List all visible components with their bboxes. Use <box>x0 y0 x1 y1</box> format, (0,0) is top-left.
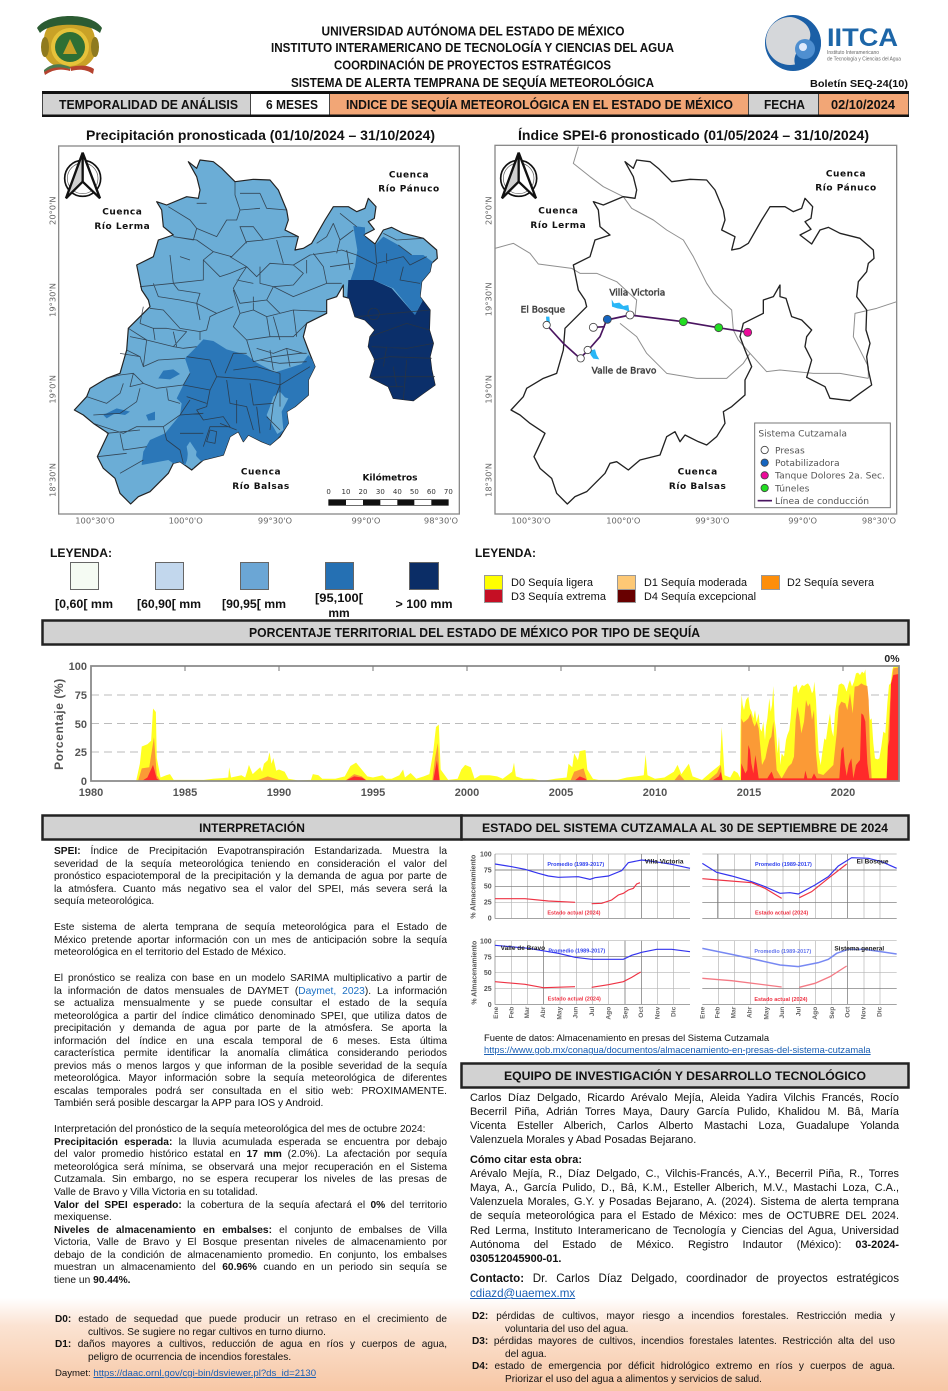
chart: Valle de Bravo: 0 <box>488 1002 492 1009</box>
dashed grid lines <box>91 695 899 752</box>
legend: precipitation classes <box>50 546 452 620</box>
team and citation text: Carlos Díaz Delgado, Ricardo Arévalo Mejía, Aleida Yadira Vilchis Francés, Rocío <box>470 1092 899 1104</box>
chart: Valle de Bravo: 25 <box>484 986 492 993</box>
chart: Villa Victoria: % Almacenamiento <box>471 855 478 919</box>
interpretation text block: México pretende aportar información con un mes de anticipación sobre la sequía <box>54 934 447 946</box>
team and citation text: Becerril Piña, Adrián Torres Maya, Daury García Pulido, Khalidou M. Bâ, María <box>470 1106 899 1118</box>
interpretation text block: se actualiza mensualmente y se puede consultar el estado de la sequía <box>54 998 447 1009</box>
axis labels: 1980 <box>79 787 103 799</box>
basin labels: Río Balsas <box>669 482 726 492</box>
chart: Valle de Bravo: Mar <box>524 1006 531 1019</box>
team and citation text: Arévalo Mejía, R., Díaz Delgado, C., Vilchis-Francés, A.Y., Becerril Piña, R., Torres <box>470 1168 899 1180</box>
panel: precipitation map <box>47 145 460 526</box>
chart: Sistema general: Sep <box>829 1007 836 1019</box>
team and citation text: Maya, A., García Pulido, D., Bâ, K.M., Esteller Alberich, M.V., Mastachi Loza, C.A., <box>470 1182 899 1194</box>
header info bar: FECHA <box>764 98 805 112</box>
coordinate labels: 99°30'O <box>258 516 293 526</box>
scale bar: 20 <box>359 488 367 496</box>
municipal boundaries <box>87 182 435 473</box>
team and citation text: Autónoma del Estado de México. Registro Indautor (México): 03-2024- <box>470 1239 899 1251</box>
heading bar: territorial percentage: PORCENTAJE TERRITORIAL DEL ESTADO DE MÉXICO POR TIPO DE SEQUÍA <box>249 625 700 640</box>
chart: Valle de Bravo: May <box>557 1006 564 1020</box>
chart: Villa Victoria: Promedio (1989-2017) <box>547 862 604 868</box>
basin labels: Cuenca <box>241 468 281 478</box>
legend: Sistema Cutzamala: Túneles <box>774 483 810 494</box>
basin labels: Cuenca <box>102 208 142 218</box>
drought definitions: D2, D3 and D4: D4: estado de emergencia por déficit hidrológico extremo en ríos y cuerpos de agua. <box>472 1361 895 1372</box>
bottom gradient band <box>0 1298 948 1391</box>
team and citation text: Cómo citar esta obra: <box>470 1154 582 1166</box>
interpretation text block: información del índice en una escala temporal de 6 meses. Esta última <box>54 1036 447 1046</box>
coordinate labels: 19°0'N <box>47 375 57 404</box>
header titles: UNIVERSIDAD AUTÓNOMA DEL ESTADO DE MÉXICO <box>322 24 625 38</box>
icon: north arrow <box>65 153 101 198</box>
chart: Valle de Bravo: Nov <box>654 1006 661 1019</box>
interpretation text block: Valor del SPEI esperado: la cobertura de la sequía afectará el 0% del territorio <box>54 1200 447 1210</box>
chart: El Bosque: Promedio (1989-2017) <box>755 862 812 868</box>
area: D3 recent years <box>741 674 899 781</box>
coordinate labels: 19°0'N <box>483 375 493 404</box>
interpretation text block: También será posible descargar la APP para IOS y Android. <box>54 1098 323 1109</box>
interpretation text block: severidad de la sequía meteorológica teniendo en consideración el valor del <box>54 858 447 870</box>
chart: Sistema general: Abr <box>746 1006 753 1018</box>
basin labels: Cuenca <box>389 170 429 180</box>
legend: precipitation classes: LEYENDA: <box>50 546 112 560</box>
axis labels: 1985 <box>173 787 197 799</box>
legend: precipitation classes: [0,60[ mm <box>55 597 113 611</box>
scale bar: 50 <box>410 488 419 496</box>
area: D0 early years <box>136 709 741 781</box>
chart: Valle de Bravo: Promedio (1989-2017) <box>548 949 605 955</box>
area: D3 early years <box>142 760 723 781</box>
data source note: https://www.gob.mx/conagua/documentos/almacenamiento-en-presas-del-sistema-cutzamala <box>484 1044 871 1055</box>
annotation: current value: 0% <box>884 653 900 665</box>
chart: Sistema general: Ago <box>812 1007 819 1020</box>
interpretation text block: la información de datos mensuales de DAYMET (Daymet, 2023). La información <box>54 986 447 996</box>
heading bar: interpretation <box>41 814 463 841</box>
basin labels: Río Lerma <box>94 222 150 232</box>
interpretation text block: Interpretación del pronóstico de la sequía meteorológica del mes de octubre 2024: <box>54 1124 426 1135</box>
basin labels: Río Lerma <box>530 221 586 231</box>
axis labels <box>52 661 855 799</box>
interpretation text block: meteorológica a partir del índice climático denominado SPEI, que utiliza datos de <box>54 1010 447 1022</box>
chart: El Bosque <box>702 854 897 918</box>
axis labels: 50 <box>75 719 87 731</box>
coordinate labels: 100°0'O <box>606 516 641 526</box>
scale bar: 30 <box>376 488 385 496</box>
interpretation text block: pronóstico espaciotemporal de la precipitación y la demanda de agua por parte de <box>54 871 447 882</box>
interpretation text block: sequía meteorológica. <box>54 896 154 907</box>
drought definitions: D2, D3 and D4: D2: pérdidas de cultivos, mayor riesgo a incendios forestales. Restricción media y <box>472 1311 895 1322</box>
coordinate labels <box>47 196 459 526</box>
heading bar: territorial percentage <box>41 619 910 646</box>
reservoir labels: Villa Victoria <box>609 289 665 299</box>
axis labels: 2015 <box>737 787 761 799</box>
data source note: Fuente de datos: Almacenamiento en presas del Sistema Cutzamala <box>484 1032 769 1043</box>
interpretation text block: tiene un 90.44%. <box>54 1274 130 1286</box>
reservoir labels <box>521 289 665 376</box>
logo: IITCA: IITCA <box>827 24 898 52</box>
team and citation text: de sequía meteorológica para el Estado de México: mes de OCTUBRE DEL 2024. <box>470 1210 899 1222</box>
heading bar: research team <box>460 1062 910 1089</box>
team and citation text: Valenzuela Morales, G.Y. y Posadas Bejarano, A. (2024). Sistema de alerta temprana <box>470 1196 899 1208</box>
legend: drought categories: D2 Sequía severa <box>787 577 875 589</box>
chart: Valle de Bravo: 50 <box>484 970 492 977</box>
interpretation text block: previos más o menos largos y que informan de la posible severidad de la sequía <box>54 1060 447 1072</box>
header info bar <box>42 91 909 117</box>
coordinate labels: 100°0'O <box>169 516 203 526</box>
interpretation text block: debajo de la condición de almacenamiento promedio. En conjunto, los embalses <box>54 1250 447 1260</box>
axis labels: 1990 <box>267 787 291 799</box>
interpretation text block: característica permite identificar la anomalía climática considerando periodos <box>54 1048 447 1059</box>
coordinate labels: 19°30'N <box>483 282 493 316</box>
logo: UAEM coat of arms <box>37 16 102 75</box>
basin labels: Río Pánuco <box>815 184 877 194</box>
drought definitions: D0 and D1 <box>55 1314 447 1379</box>
legend: Sistema Cutzamala: Tanque Dolores 2a. Sec. <box>774 471 885 482</box>
basin labels <box>530 169 877 492</box>
axis labels: 2010 <box>643 787 667 799</box>
heading: precipitation map: Precipitación pronosticada (01/10/2024 – 31/10/2024) <box>86 127 435 143</box>
heading bar: research team: EQUIPO DE INVESTIGACIÓN Y DESARROLLO TECNOLÓGICO <box>504 1068 866 1083</box>
panel: SPEI map with Cutzamala system <box>483 144 898 526</box>
coordinate labels: 100°30'O <box>75 516 115 526</box>
chart: Valle de Bravo: Valle de Bravo <box>501 945 545 952</box>
interpretation text block: El pronóstico se realiza con base en un modelo SARIMA multiplicativo a partir de <box>54 973 447 984</box>
axis labels: 75 <box>75 690 87 702</box>
header info bar: 6 MESES <box>266 98 318 112</box>
chart: Villa Victoria: Estado actual (2024) <box>547 910 601 916</box>
chart: Sistema general: Jul <box>796 1007 803 1016</box>
state map with rainfall classes <box>74 160 443 504</box>
drought definitions: D0 and D1: Daymet: https://daac.ornl.gov/cgi-bin/dsviewer.pl?ds_id=2130 <box>55 1368 316 1379</box>
chart: Sistema general: Promedio (1989-2017) <box>754 949 811 955</box>
chart: Villa Victoria: 25 <box>484 900 492 907</box>
chart: Valle de Bravo: Estado actual (2024) <box>548 997 601 1003</box>
coordinate labels: 99°0'O <box>788 516 818 526</box>
scale bar: 70 <box>444 488 453 496</box>
scale bar: 60 <box>427 488 436 496</box>
team and citation text: Red Lerma, Instituto Interamericano de Tecnología y Ciencias del Agua, Universidad <box>470 1225 899 1237</box>
data source note <box>484 1032 871 1055</box>
legend: precipitation classes: [95,100[ <box>315 591 363 605</box>
basin boundaries <box>495 147 897 378</box>
chart: Villa Victoria: 100 <box>480 852 492 859</box>
axis labels: 2020 <box>831 787 855 799</box>
interpretation text block: del valor promedio histórico estatal en 17 mm (2.0%). La afectación por sequía <box>54 1149 447 1160</box>
chart: El Bosque: El Bosque <box>857 858 889 865</box>
drought definitions: D0 and D1: D1: daños mayores a cultivos, reducción de agua en ríos y cuerpos de agua, <box>55 1339 447 1350</box>
chart: drought percentage over time <box>52 653 900 799</box>
legend: Sistema Cutzamala: Línea de conducción <box>775 496 869 507</box>
chart: Villa Victoria: 75 <box>484 867 492 874</box>
legend: drought categories: D1 Sequía moderada <box>644 577 748 589</box>
legend: Sistema Cutzamala <box>755 423 890 508</box>
legend: drought categories: LEYENDA: <box>475 546 536 560</box>
heading bar: interpretation: INTERPRETACIÓN <box>199 820 305 835</box>
chart: Villa Victoria: 0 <box>488 916 492 923</box>
basin labels: Cuenca <box>826 169 866 179</box>
chart: Sistema general: Dic <box>877 1006 884 1017</box>
axis labels: 2005 <box>549 787 573 799</box>
team and citation text: 030512045900-01. <box>470 1253 561 1265</box>
chart: Sistema general: Sistema general <box>834 945 884 952</box>
reservoir labels: Valle de Bravo <box>592 366 657 376</box>
coordinate labels: 100°30'O <box>511 516 551 526</box>
chart: Valle de Bravo: Abr <box>540 1006 547 1018</box>
interpretation text block: Victoria, Valle de Bravo y El Bosque presentan niveles de almacenamiento por <box>54 1237 447 1248</box>
header info bar: INDICE DE SEQUÍA METEOROLÓGICA EN EL ESTADO DE MÉXICO <box>346 97 733 112</box>
chart: Valle de Bravo: Ene <box>493 1006 500 1019</box>
conduction line <box>547 315 748 358</box>
chart: Valle de Bravo <box>471 938 690 1020</box>
interpretation text block: la atmósfera. Cuanto más negativo sea el valor del SPEI, más severa será la <box>54 884 447 894</box>
chart: Villa Victoria: Villa Victoria <box>645 858 684 865</box>
coordinate labels: 20°0'N <box>483 196 493 225</box>
axis labels: 1995 <box>361 787 385 799</box>
header info bar: 02/10/2024 <box>831 98 895 112</box>
legend: precipitation classes: [90,95[ mm <box>222 597 286 611</box>
scale bar: Kilómetros <box>362 473 418 484</box>
chart: Sistema general: Ene <box>700 1006 707 1019</box>
basin labels: Cuenca <box>678 468 718 478</box>
drought definitions: D0 and D1: D0: estado de sequedad que puede producir un retraso en el crecimiento de <box>55 1314 447 1325</box>
interpretation text block: meteorológica. Mayor información sobre la sequía meteorológica de diferentes <box>54 1073 447 1084</box>
basin labels: Río Pánuco <box>378 185 440 195</box>
logo: IITCA <box>765 15 902 71</box>
scale bar <box>326 473 453 505</box>
scale bar: 0 <box>326 488 331 496</box>
team and citation text: Valenzuela Morales y Abad Posadas Bejarano. <box>470 1134 696 1146</box>
logo: IITCA: de Tecnología y Ciencias del Agua <box>827 56 902 62</box>
interpretation text block: Precipitación esperada: la lluvia acumulada esperada se encuentra por debajo <box>54 1136 447 1148</box>
area: D1-D2 early years <box>138 737 723 781</box>
team and citation text <box>470 1092 900 1300</box>
header titles: Boletín SEQ-24(10) <box>810 78 908 90</box>
drought definitions: D0 and D1: cultivos. Se sugiere no regar cultivos en turno diurno. <box>88 1326 326 1338</box>
heading bar: Cutzamala state <box>460 814 910 841</box>
team and citation text: Contacto: Dr. Carlos Díaz Delgado, coordinador de proyectos estratégicos <box>470 1272 899 1285</box>
interpretation text block: meteorológica será mínima, se observará una mejor recuperación en el Sistema <box>54 1162 447 1172</box>
interpretation text block: Este sistema de alerta temprana de sequía meteorológica para el Estado de <box>54 922 447 933</box>
basin labels: Cuenca <box>538 207 578 217</box>
header info bar: TEMPORALIDAD DE ANÁLISIS <box>59 97 238 112</box>
team and citation text: Vicenta Esteller Alberich, Carlos Alberto Mastachi Loza, Guadalupe Yolanda <box>470 1120 899 1132</box>
basin labels: Río Balsas <box>232 482 290 492</box>
legend: Sistema Cutzamala: Sistema Cutzamala <box>758 429 847 440</box>
coordinate labels: 19°30'N <box>47 283 57 317</box>
axis labels: Porcentaje (%) <box>52 678 66 770</box>
chart: Valle de Bravo: Jun <box>573 1007 580 1019</box>
chart: Sistema general: Mar <box>730 1006 737 1019</box>
header titles: SISTEMA DE ALERTA TEMPRANA DE SEQUÍA METEOROLÓGICA <box>291 75 654 90</box>
coordinate labels: 98°30'O <box>424 516 459 526</box>
logo: IITCA: Instituto Interamericano <box>827 50 879 56</box>
legend: drought categories <box>475 546 875 603</box>
area: D0 recent years <box>740 666 899 781</box>
drought definitions: D2, D3 and D4: voluntaria del uso del agua. <box>505 1324 628 1335</box>
legend: precipitation classes: mm <box>328 606 350 620</box>
chart: Valle de Bravo: Dic <box>671 1006 678 1017</box>
heading: SPEI map: Índice SPEI-6 pronosticado (01/05/2024 – 31/10/2024) <box>518 127 869 143</box>
charts: reservoir storage <box>470 852 897 1020</box>
chart: Valle de Bravo: Sep <box>622 1007 629 1019</box>
interpretation text block: muestran un almacenamiento del 60.96% cuando en un periodo sin sequía se <box>54 1262 447 1273</box>
reservoirs water bodies <box>546 299 629 359</box>
state outline <box>511 160 874 504</box>
legend: precipitation classes: [60,90[ mm <box>137 597 201 611</box>
interpretation text block: SPEI: Índice de Precipitación Evapotranspiración Estandarizada. Muestra la <box>54 846 447 857</box>
drought definitions: D0 and D1: peligro de ocurrencia de incendios forestales. <box>88 1352 291 1363</box>
reservoir labels: El Bosque <box>521 305 566 315</box>
area: D1-D2 recent years <box>741 667 899 781</box>
axis labels: 2000 <box>455 787 479 799</box>
scale bar: 40 <box>393 488 402 496</box>
basin labels <box>94 170 440 492</box>
chart: Sistema general: Nov <box>861 1006 868 1019</box>
coordinate labels: 20°0'N <box>47 196 57 225</box>
chart: El Bosque: Estado actual (2024) <box>755 910 808 916</box>
legend: Sistema Cutzamala: Presas <box>775 445 805 456</box>
coordinate labels: 18°30'N <box>47 463 57 497</box>
legend: drought categories: D0 Sequía ligera <box>511 577 594 589</box>
chart: Villa Victoria: 50 <box>484 884 492 891</box>
drought definitions: D2, D3 and D4: del agua. <box>505 1349 547 1360</box>
header titles <box>271 24 908 90</box>
axes box <box>91 666 899 781</box>
chart: Valle de Bravo: Jul <box>589 1007 596 1016</box>
legend: precipitation classes: > 100 mm <box>396 597 452 611</box>
chart: Sistema general: Oct <box>844 1006 851 1018</box>
interpretation text block: escalas temporales podrá ser consultada en el sitio web: PROXIMAMENTE. <box>54 1086 447 1096</box>
chart: Valle de Bravo: Oct <box>638 1006 645 1018</box>
chart: Valle de Bravo: 100 <box>480 938 492 945</box>
chart: Sistema general <box>700 941 897 1020</box>
header titles: INSTITUTO INTERAMERICANO DE TECNOLOGÍA Y CIENCIAS DEL AGUA <box>271 40 674 55</box>
chart: Valle de Bravo: % Almacenamiento <box>471 941 478 1005</box>
chart: Sistema general: Feb <box>715 1007 722 1019</box>
drought definitions: D2, D3 and D4: D3: pérdidas mayores de cultivos, incendios forestales latentes. Restricción alta del uso <box>472 1336 895 1347</box>
interpretation text block: Niveles de almacenamiento en embalses: el conjunto de embalses de Villa <box>54 1224 447 1236</box>
chart: Valle de Bravo: 75 <box>484 954 492 961</box>
chart: Valle de Bravo: Ago <box>606 1007 613 1020</box>
legend: drought categories: D3 Sequía extrema <box>511 591 607 603</box>
icon: north arrow <box>501 153 537 198</box>
scale bar: 10 <box>342 488 350 496</box>
axis labels: 25 <box>75 747 87 759</box>
coordinate labels <box>483 196 897 526</box>
interpretation text block: mexiquense. <box>54 1212 112 1223</box>
coordinate labels: 99°30'O <box>695 516 730 526</box>
interpretation text block: Cutzamala. Sin embargo, no se espera recuperar los niveles de las presas de <box>54 1174 447 1185</box>
header titles: COORDINACIÓN DE PROYECTOS ESTRATÉGICOS <box>334 58 611 72</box>
interpretation text block: precipitación y demanda de agua por parte de la atmósfera. Se aporta la <box>54 1023 447 1034</box>
axis labels: 100 <box>69 661 87 673</box>
legend: drought categories: D4 Sequía excepcional <box>644 591 756 603</box>
team and citation text: cdiazd@uaemex.mx <box>470 1287 575 1300</box>
interpretation text block <box>54 845 448 1286</box>
drought definitions: D2, D3 and D4 <box>472 1311 895 1385</box>
coordinate labels: 18°30'N <box>483 463 493 497</box>
coordinate labels: 99°0'O <box>352 516 381 526</box>
interpretation text block: Valle de Bravo y Villa Victoria en su totalidad. <box>54 1186 258 1198</box>
chart: Sistema general: May <box>763 1006 770 1020</box>
chart: Sistema general: Estado actual (2024) <box>754 997 808 1003</box>
system points <box>543 311 752 362</box>
chart: Sistema general: Jun <box>779 1007 786 1019</box>
axis labels: 0 <box>81 776 87 788</box>
heading bar: Cutzamala state: ESTADO DEL SISTEMA CUTZAMALA AL 30 DE SEPTIEMBRE DE 2024 <box>482 821 888 835</box>
drought definitions: D2, D3 and D4: Priorizar el uso del agua a alimentos y servicios de salud. <box>505 1374 762 1385</box>
chart: Villa Victoria <box>471 852 690 923</box>
chart: Valle de Bravo: Feb <box>508 1007 515 1019</box>
coordinate labels: 98°30'O <box>862 516 897 526</box>
legend: Sistema Cutzamala: Potabilizadora <box>775 458 840 469</box>
interpretation text block: meteorológica en el territorio del Estado de México. <box>54 947 286 958</box>
